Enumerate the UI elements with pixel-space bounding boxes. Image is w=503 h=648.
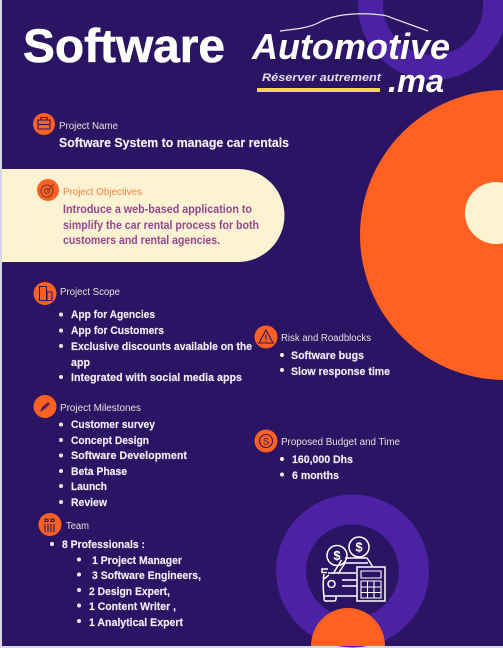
logo: Automotive.ma (251, 14, 450, 99)
section: team: 1 Content Writer , (89, 601, 176, 613)
icon: pen (34, 395, 56, 418)
section: team: 1 Analytical Expert (89, 617, 183, 629)
icon: warning triangle (254, 326, 278, 348)
logo: Automotive.ma: Automotive (251, 26, 450, 67)
section: project milestones: Software Development (71, 450, 187, 462)
section: team: 3 Software Engineers, (92, 570, 201, 582)
section: project scope: Project Scope (60, 287, 120, 298)
panel: project objectives: Project Objectives (63, 186, 142, 198)
section: proposed budget and time (254, 430, 400, 482)
section: project scope: App for Agencies (71, 309, 155, 321)
section: team: 1 Project Manager (92, 555, 183, 567)
section: proposed budget and time: Proposed Budget and Time (281, 437, 400, 448)
section: project milestones: Launch (71, 481, 107, 493)
section: project milestones: Beta Phase (71, 466, 127, 478)
section: risk and roadblocks: Slow response time (291, 366, 390, 378)
section: team: Team (66, 521, 89, 532)
section: proposed budget and time: 160,000 Dhs (292, 454, 353, 466)
icon: coin: S (263, 436, 269, 448)
panel: project objectives (2, 169, 284, 262)
title: Software (23, 19, 225, 72)
panel: project objectives: customers and rental agencies. (63, 235, 220, 247)
decoration: bottom purple ring (291, 510, 414, 632)
icon: coin (254, 430, 278, 452)
section: project scope: Integrated with social media apps (71, 372, 242, 384)
section: project scope: App for Customers (71, 325, 164, 337)
section: project scope: Exclusive discounts available on the (71, 341, 252, 353)
section: team: 8 Professionals : (62, 539, 145, 551)
decoration: top purple ring (370, 0, 496, 68)
panel: project objectives: simplify the car rental process for both (63, 220, 259, 232)
section: risk and roadblocks: Risk and Roadblocks (281, 333, 371, 344)
section: risk and roadblocks (254, 326, 390, 378)
section: project milestones: Concept Design (71, 435, 149, 447)
section: proposed budget and time: 6 months (292, 470, 339, 482)
icon: devices (34, 282, 56, 305)
section: project milestones: Review (71, 497, 107, 509)
icon: car with coins and calculator (322, 537, 385, 601)
section: team (38, 513, 201, 629)
icon: target (37, 179, 59, 201)
decoration: large orange circle (360, 90, 503, 380)
icon: people (38, 513, 62, 536)
section: project name (33, 113, 289, 150)
section: project scope: app (71, 357, 90, 369)
logo: Automotive.ma: Réserver autrement (262, 72, 383, 84)
section: project scope (34, 282, 252, 384)
section: project name: Software System to manage car rentals (59, 136, 289, 150)
section: risk and roadblocks: Software bugs (291, 350, 364, 362)
decoration: bottom orange circle (311, 608, 385, 646)
section: project milestones: Project Milestones (60, 403, 141, 414)
section: team: 2 Design Expert, (89, 586, 170, 598)
icon: car with coins and calculator: $ (333, 548, 341, 563)
section: project milestones (34, 395, 187, 509)
icon: briefcase (33, 113, 55, 135)
panel: project objectives: Introduce a web-based application to (63, 204, 252, 216)
section: project milestones: Customer survey (71, 419, 156, 431)
icon: car with coins and calculator: $ (355, 540, 363, 554)
logo: Automotive.ma: .ma (388, 63, 444, 99)
section: project name: Project Name (59, 121, 118, 132)
